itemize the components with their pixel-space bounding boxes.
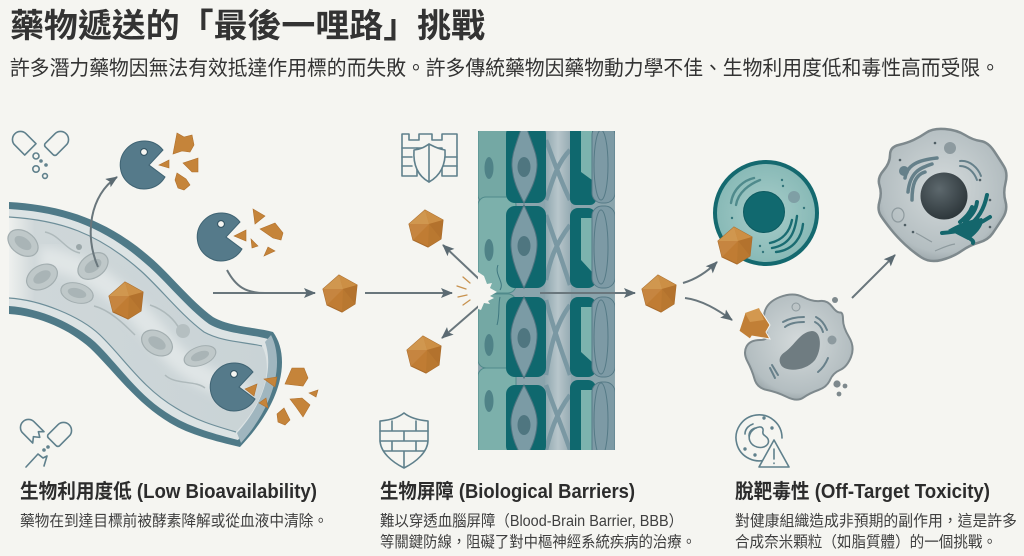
icon: toxic cell warning: [736, 415, 789, 467]
blood vessel: [3, 202, 282, 447]
arrow: to barrier: [365, 292, 452, 294]
right oval cells: [592, 125, 615, 462]
large diseased gray cell: [879, 129, 1006, 261]
right gray fibre channel: [545, 131, 571, 450]
nanoparticle approaching barrier: [323, 275, 357, 312]
spindle cells: [511, 120, 537, 462]
arrow: vessel to enzyme: [91, 177, 117, 267]
arrow: through barrier: [540, 292, 635, 294]
panel: biological barriers text: 生物屏障 (Biological Barriers): [380, 480, 635, 503]
subtitle: 許多潛力藥物因無法有效抵達作用標的而失敗。許多傳統藥物因藥物動力學不佳、生物利用度低和毒性高而受限。: [10, 57, 1000, 80]
arrow: to nanoparticle: [213, 270, 315, 293]
panel: biological barriers text: [380, 480, 696, 551]
icon: open capsule: [9, 128, 72, 178]
panel: off-target toxicity text: [735, 480, 1017, 551]
icon: broken capsule: [17, 416, 75, 467]
panel: off-target toxicity text: 合成奈米顆粒（如脂質體）的一個挑戰。: [735, 533, 997, 551]
nanoparticle in vessel: [109, 282, 143, 319]
enzyme degrading particle, top: [120, 133, 198, 190]
teal inner panels: [581, 131, 592, 450]
deflected nanoparticles: [407, 210, 480, 373]
arrows: to healthy and diseased cells: [683, 262, 732, 320]
left endothelial cells: [478, 125, 516, 458]
impact sparks: [457, 277, 470, 305]
healthy teal cell: [715, 162, 817, 264]
panel: low bioavailability text: 藥物在到達目標前被酵素降解或從血液中清除。: [20, 512, 328, 530]
nanoparticle after barrier: [642, 275, 676, 312]
panel: low bioavailability text: 生物利用度低 (Low Bioavailability): [20, 480, 317, 503]
red blood cells: [3, 224, 219, 370]
arrow: to toxic cell: [852, 255, 895, 298]
enzyme degrading particle, middle: [197, 209, 283, 261]
panel: biological barriers text: 等關鍵防線，阻礙了對中樞神經系統疾病的治療。: [380, 532, 696, 551]
icon: brick shield: [380, 413, 428, 468]
icon: fortress shield: [402, 134, 457, 182]
panel: biological barriers text: 難以穿透血腦屏障（Blood-Brain Barrier, BBB）: [380, 512, 683, 530]
panel: low bioavailability text: [20, 480, 328, 530]
blood-brain barrier tissue: [478, 120, 615, 462]
breach in barrier: [478, 272, 497, 310]
dark teal junctions: [506, 120, 596, 460]
panel: off-target toxicity text: 對健康組織造成非預期的副作用，這是許多: [735, 511, 1017, 530]
panel: off-target toxicity text: 脫靶毒性 (Off-Target Toxicity): [735, 480, 990, 503]
damaged gray cell: [739, 294, 853, 400]
title: 藥物遞送的「最後一哩路」挑戰: [10, 7, 485, 44]
enzyme degrading particle, vessel end: [210, 363, 318, 425]
